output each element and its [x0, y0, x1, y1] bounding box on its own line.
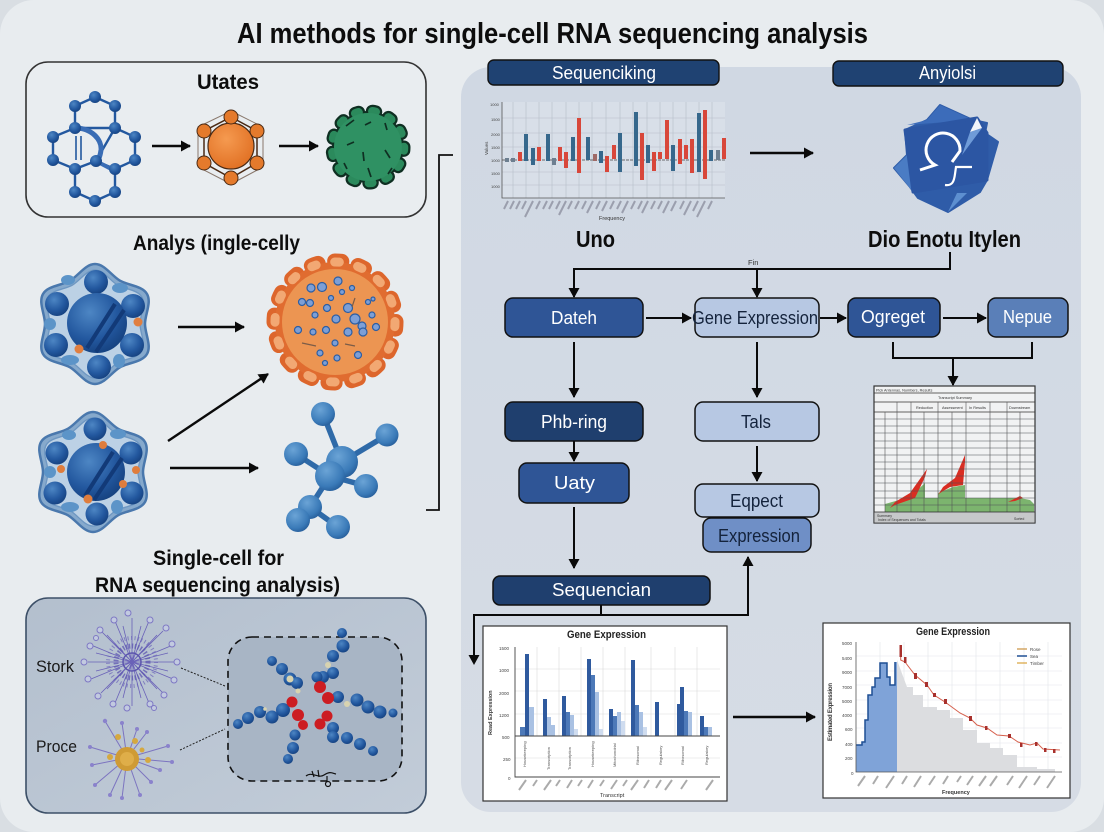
bar chart: Gene Expression left: 250 [503, 757, 511, 762]
box: Sequencian [493, 576, 710, 605]
bar chart: sequencing: 2000 [491, 132, 501, 137]
area chart: Gene Expression right: 0 [851, 771, 854, 776]
table area chart: Assessment [942, 406, 964, 410]
bar chart: sequencing: 1500 [491, 117, 501, 122]
label: Stork: Stork [36, 657, 74, 676]
area chart: Gene Expression right: Gene Expression [916, 626, 990, 638]
box: Nepue: Nepue [1003, 307, 1052, 327]
area chart: Gene Expression right: Frequency [942, 790, 971, 796]
panel: sequencing workflow [461, 60, 1081, 812]
icon: yellow radial network [88, 719, 174, 800]
bar chart: Gene Expression left: Regulatory [658, 746, 663, 765]
arrow [750, 152, 813, 154]
area chart: Gene Expression right: Estimated Expression [828, 683, 834, 741]
area chart: Gene Expression right: Timber [1030, 661, 1044, 666]
area chart: Gene Expression right: 9000 [842, 670, 853, 675]
area chart: Gene Expression right: Rose [1030, 647, 1041, 652]
box: Tals [695, 402, 819, 441]
icon: orange hexagon sphere [197, 110, 264, 185]
box: Tals: Tals [741, 412, 771, 432]
bar chart: Gene Expression left: Gene Expression [567, 629, 646, 641]
connector from Sequencian to chart and Expression [468, 557, 748, 665]
bar chart: Gene Expression left: 1000 [499, 668, 510, 673]
dashed inset box with blue beaded strands [228, 628, 402, 786]
table area chart: Pick Antennas, Numbers, Results [876, 388, 932, 392]
pill: Sequenciking [488, 60, 719, 85]
table area chart: Sorted [1014, 517, 1024, 521]
icon: purple radial network [81, 610, 180, 711]
bar chart: sequencing [484, 102, 726, 222]
label: Proce: Proce [36, 737, 77, 756]
arrow [573, 441, 575, 461]
bar chart: Gene Expression left: 0 [508, 776, 511, 781]
bracket arrow into table chart [893, 342, 1032, 385]
bar chart: Gene Expression left: Housekeeping [522, 741, 527, 767]
icon: green spiky cell [332, 111, 404, 183]
area chart: Gene Expression right: 200 [845, 756, 853, 761]
area chart: Gene Expression right: Sea [1030, 654, 1039, 659]
title: AI methods for single-cell RNA sequencing analysis [237, 18, 868, 50]
label: Uno: Uno [576, 226, 615, 252]
bar chart: Gene Expression left: Ribosomal [635, 746, 640, 765]
table area chart [874, 386, 1035, 523]
bar chart: Gene Expression left [483, 626, 727, 801]
bracket connector [426, 155, 453, 510]
bar chart: Gene Expression left: Ribosomal [680, 746, 685, 765]
panel: Stork and Proce [26, 598, 426, 813]
arrow [168, 374, 268, 441]
bar chart: Gene Expression left: 500 [502, 735, 510, 740]
box: Sequencian: Sequencian [552, 580, 651, 600]
arrow [820, 317, 846, 319]
icon: hexagonal molecule [47, 91, 141, 207]
arrow [646, 317, 691, 319]
bar chart: Gene Expression left: 1500 [499, 646, 510, 651]
area chart: Gene Expression right: 5400 [842, 656, 853, 661]
table area chart: Summary [877, 514, 892, 518]
box: Uaty: Uaty [554, 473, 595, 493]
area chart: Gene Expression right: 5000 [842, 699, 853, 704]
area chart: Gene Expression right: 600 [845, 727, 853, 732]
arrow [279, 145, 318, 147]
box: Ogreget [848, 298, 940, 337]
bar chart: Gene Expression left: Read Expression [488, 690, 494, 735]
bar chart: Gene Expression left: 1200 [499, 713, 510, 718]
area chart: Gene Expression right: 4000 [842, 713, 853, 718]
icon: orange spiky cell [274, 261, 396, 383]
box: Eqpect [695, 484, 819, 517]
box: Phb-ring [505, 402, 643, 441]
bar chart: Gene Expression left: Mitochondrial [612, 743, 617, 767]
bar chart: Gene Expression left: Transcription [546, 747, 551, 770]
box: Ogreget: Ogreget [861, 307, 925, 327]
bar chart: sequencing: 1000 [490, 102, 500, 107]
box: Gene Expression [692, 298, 819, 337]
bar chart: Gene Expression left: Transcription [567, 747, 572, 770]
icon: blue cell top [41, 264, 149, 384]
label: Fin: Fin [748, 258, 758, 267]
box: Dateh: Dateh [551, 308, 597, 328]
table area chart: Downstream [1009, 406, 1030, 410]
pill: Sequenciking: Sequenciking [552, 63, 656, 83]
bar chart: Gene Expression left: 2000 [499, 691, 510, 696]
bar chart: Gene Expression left: Housekeeping [590, 741, 595, 767]
dotted connectors [180, 668, 225, 750]
heading: Single-cell for RNA sequencing analysis [95, 547, 340, 597]
box: Uaty [519, 463, 629, 503]
pill: Anyiolsi [833, 61, 1063, 86]
heading: Single-cell for RNA sequencing analysis: RNA sequencing analysis) [95, 574, 340, 597]
table area chart: Reduction [916, 406, 933, 410]
heading: Single-cell for RNA sequencing analysis: Single-cell for [153, 547, 284, 570]
connector with two arrows [574, 252, 950, 297]
area chart: Gene Expression right [823, 623, 1070, 798]
box: Nepue [988, 298, 1068, 337]
area chart: Gene Expression right: 400 [845, 742, 853, 747]
bar chart: sequencing: 1000 [491, 184, 501, 189]
box: Expression: Expression [718, 526, 800, 546]
table area chart: In Results [969, 406, 986, 410]
box: Dateh [505, 298, 643, 337]
arrow [573, 342, 575, 397]
bar chart: sequencing: Frequency [599, 216, 625, 222]
arrow [178, 326, 244, 328]
bar chart: sequencing: 1500 [491, 171, 501, 176]
heading: Analys: Analys (ingle-celly [133, 232, 300, 255]
bar chart: sequencing: 1500 [491, 145, 501, 150]
bar chart: sequencing: 1000 [491, 158, 501, 163]
table area chart: Index of Sequences and Totals [878, 518, 926, 522]
icon: blue branched molecule [284, 402, 398, 539]
arrow [756, 446, 758, 481]
icon: blue cell bottom [39, 412, 147, 532]
icon: blue star badge [894, 105, 998, 212]
arrow [733, 716, 815, 718]
bar chart: Gene Expression left: Regulatory [704, 746, 709, 765]
arrow [152, 145, 190, 147]
panel: Utates [26, 62, 426, 217]
heading: Utates: Utates [197, 71, 259, 94]
area chart: Gene Expression right: 5000 [842, 641, 853, 646]
box: Eqpect: Eqpect [730, 491, 783, 511]
bar chart: sequencing: Values [484, 141, 489, 155]
box: Phb-ring: Phb-ring [541, 412, 607, 432]
pill: Anyiolsi: Anyiolsi [919, 63, 976, 83]
area chart: Gene Expression right: 7000 [842, 685, 853, 690]
arrow [170, 467, 258, 469]
box: Expression [703, 518, 811, 552]
arrow [756, 342, 758, 397]
box: Gene Expression: Gene Expression [692, 308, 818, 328]
arrow [943, 317, 986, 319]
table area chart: Transcript Summary [938, 396, 972, 400]
arrow [573, 507, 575, 568]
bar chart: Gene Expression left: Transcript [600, 793, 625, 799]
label: Dio Enotu Itylen: Dio Enotu Itylen [868, 226, 1021, 252]
